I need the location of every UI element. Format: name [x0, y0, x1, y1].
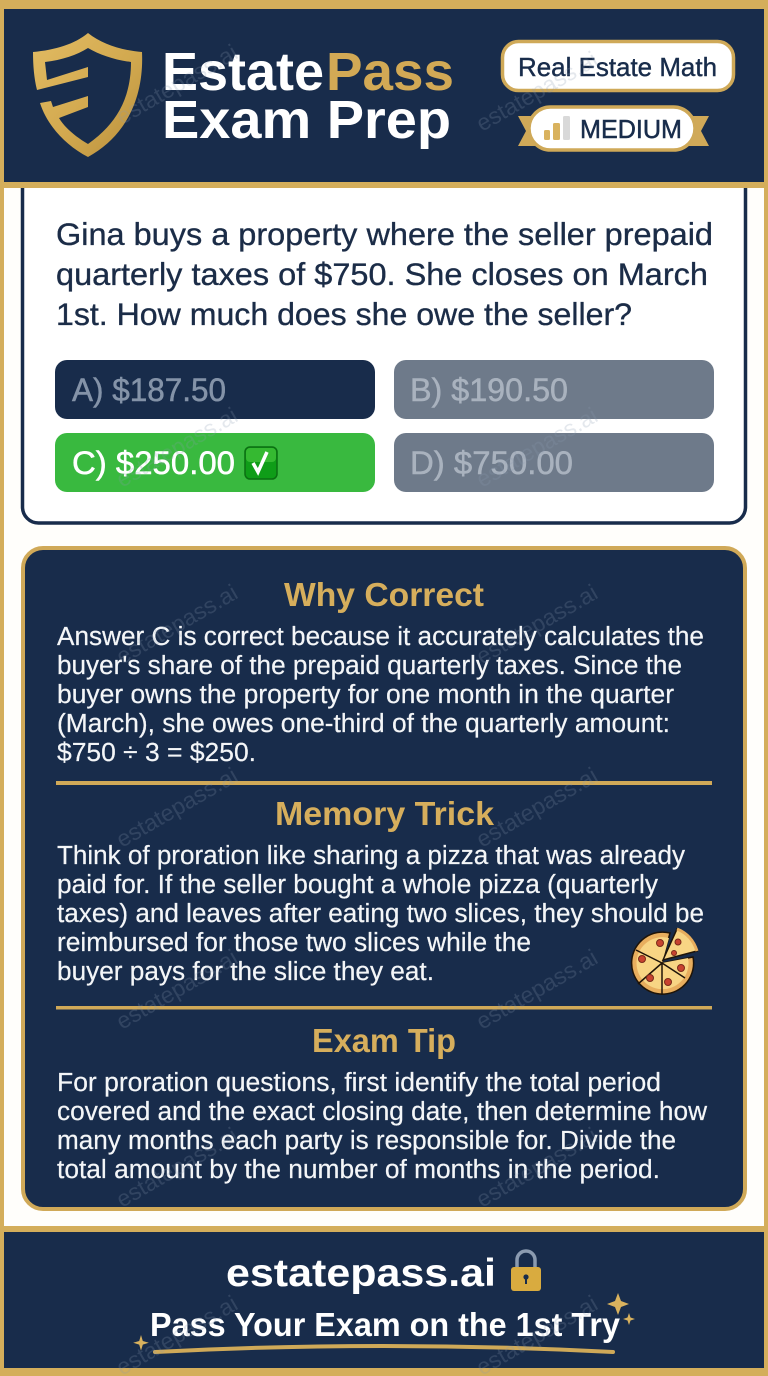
- badge: real estate math: [502, 42, 734, 90]
- heading: exam tip: Exam Tip: [312, 1022, 456, 1059]
- text: exam tip body: many months each party is responsible for. Divide the: [57, 1127, 676, 1155]
- watermarks: estatepass.ai: [112, 579, 242, 669]
- text: exam tip body: total amount by the number of months in the period.: [57, 1156, 660, 1184]
- option D: [394, 433, 714, 492]
- text: why correct body: Answer C is correct because it accurately calculates the: [57, 623, 704, 651]
- logo text: Exam Prep: [162, 90, 451, 150]
- tagline underline: [155, 1346, 613, 1352]
- watermarks: estatepass.ai: [112, 402, 242, 492]
- option A: A) $187.50: [72, 372, 226, 408]
- watermarks: estatepass.ai: [472, 402, 602, 492]
- watermarks: estatepass.ai: [472, 1122, 602, 1212]
- logo text: [162, 42, 454, 150]
- icon: green check mark: [245, 447, 277, 479]
- logo text: Pass: [326, 42, 454, 102]
- text: why correct body: [57, 623, 704, 767]
- text: why correct body: buyer owns the property for one month in the quarter: [57, 681, 675, 709]
- badge: medium difficulty: [518, 107, 709, 150]
- watermarks: estatepass.ai: [472, 579, 602, 669]
- icon: gold shield logo: [33, 33, 142, 157]
- watermarks: [112, 39, 602, 1376]
- text: memory trick body: buyer pays for the slice they eat.: [57, 958, 434, 986]
- text: why correct body: (March), she owes one-third of the quarterly amount:: [57, 710, 670, 738]
- watermarks: estatepass.ai: [472, 762, 602, 852]
- panel: question card: [22, 150, 746, 523]
- text: exam tip body: covered and the exact closing date, then determine how: [57, 1098, 708, 1126]
- text: why correct body: $750 ÷ 3 = $250.: [57, 739, 256, 767]
- watermarks: estatepass.ai: [112, 944, 242, 1034]
- watermarks: estatepass.ai: [112, 39, 242, 129]
- badge: real estate math: Real Estate Math: [518, 52, 717, 82]
- panel: footer: [0, 1226, 768, 1376]
- question text: Gina buys a property where the seller prepaid: [56, 216, 713, 252]
- text: memory trick body: Think of proration like sharing a pizza that was already: [57, 842, 685, 870]
- icon: sparkles: [133, 1293, 635, 1351]
- icon: pizza: [632, 929, 697, 995]
- text: exam tip body: [57, 1069, 708, 1184]
- panel: header: [0, 0, 768, 188]
- question text: [56, 216, 713, 332]
- text: memory trick body: taxes) and leaves after eating two slices, they should be: [57, 900, 704, 928]
- watermarks: estatepass.ai: [472, 944, 602, 1034]
- text: memory trick body: paid for. If the seller bought a whole pizza (quarterly: [57, 871, 658, 899]
- option A: [55, 360, 375, 419]
- question text: 1st. How much does she owe the seller?: [56, 296, 632, 332]
- tagline: Pass Your Exam on the 1st Try: [150, 1306, 621, 1343]
- option C correct: [55, 433, 375, 492]
- watermarks: estatepass.ai: [472, 46, 602, 136]
- badge: medium difficulty: MEDIUM: [580, 114, 682, 144]
- question text: quarterly taxes of $750. She closes on March: [56, 256, 708, 292]
- option B: [394, 360, 714, 419]
- option B: B) $190.50: [410, 372, 568, 408]
- text: memory trick body: [57, 842, 704, 986]
- icon: padlock: [511, 1251, 541, 1291]
- text: exam tip body: For proration questions, first identify the total period: [57, 1069, 661, 1097]
- heading: why correct: Why Correct: [284, 576, 484, 613]
- text: why correct body: buyer's share of the prepaid quarterly taxes. Since the: [57, 652, 682, 680]
- heading: memory trick: Memory Trick: [275, 795, 495, 832]
- icon: signal bars: [544, 116, 570, 140]
- footer url: estatepass.ai: [226, 1252, 496, 1295]
- watermarks: estatepass.ai: [112, 762, 242, 852]
- text: memory trick body: reimbursed for those two slices while the: [57, 929, 531, 957]
- option C correct: C) $250.00: [72, 445, 235, 481]
- watermarks: estatepass.ai: [112, 1122, 242, 1212]
- logo text: Estate: [162, 42, 324, 102]
- panel: explanation: [23, 548, 745, 1209]
- option D: D) $750.00: [410, 445, 573, 481]
